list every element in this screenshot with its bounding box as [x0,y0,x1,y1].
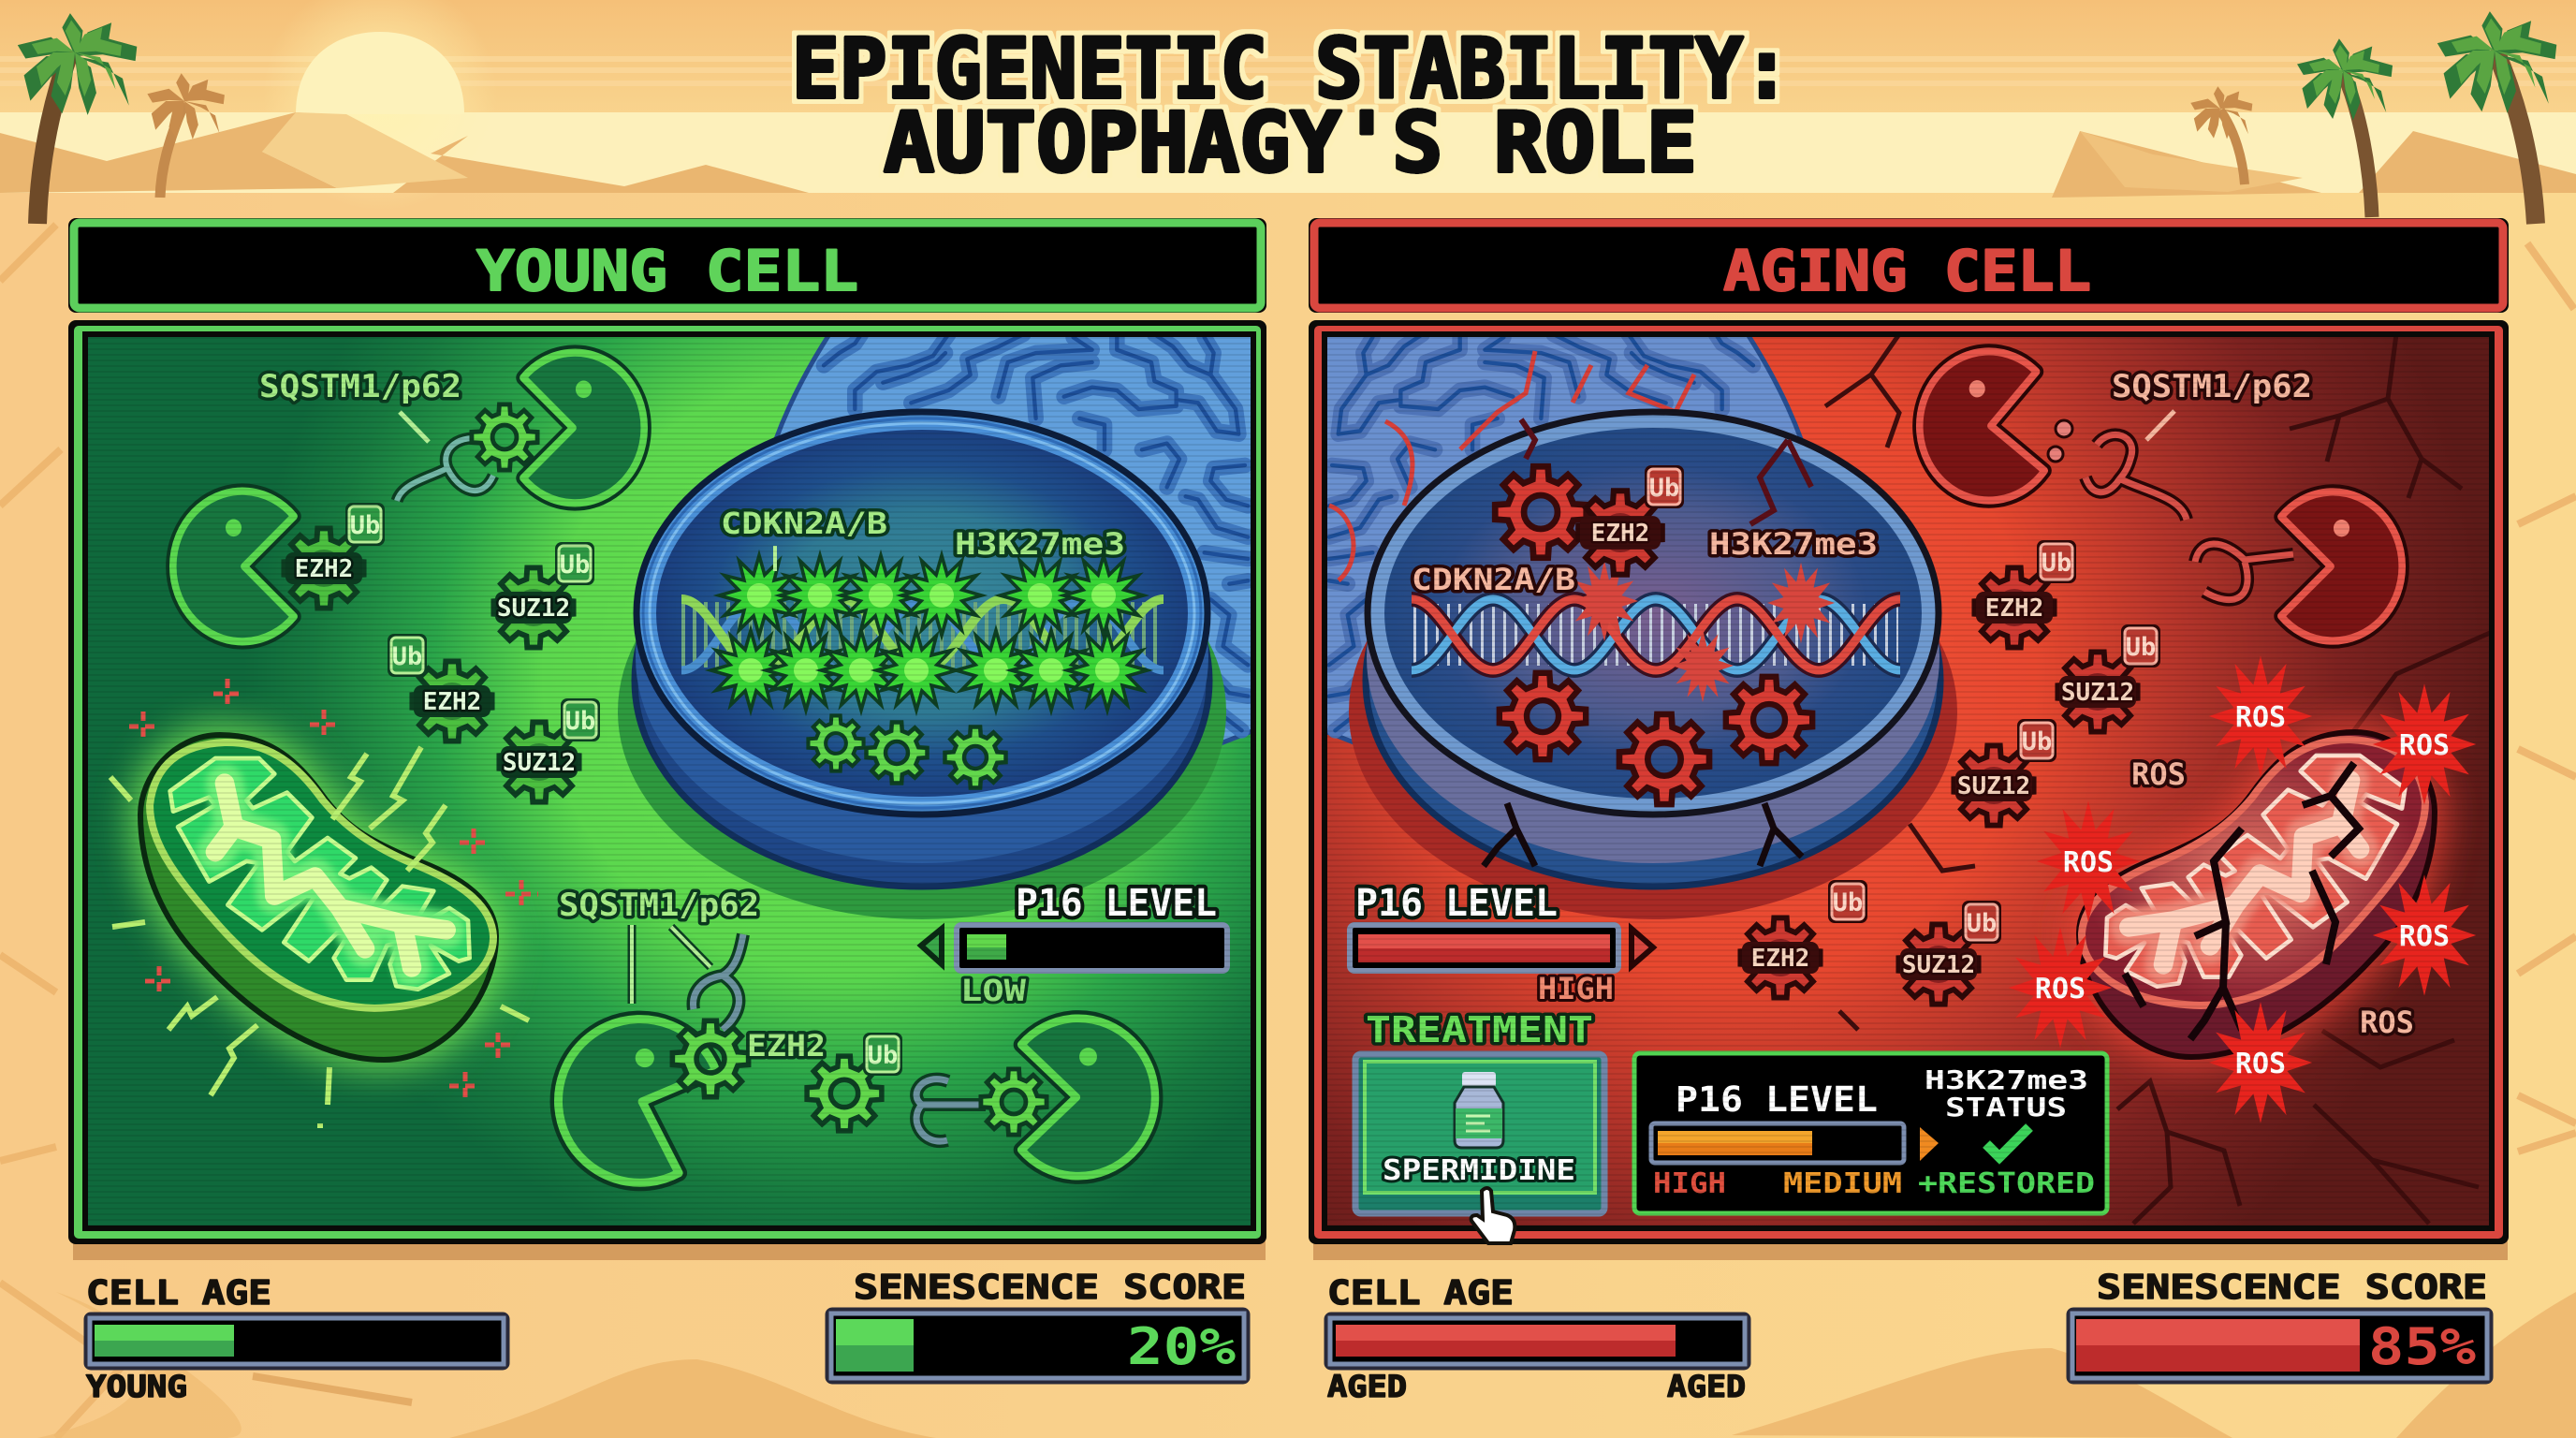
DNA with damage bursts [1412,561,1900,702]
gauge: aging cell age: AGED [1327,1369,1407,1404]
label: CDKN2A/B: CDKN2A/B [721,506,887,541]
header: aging cell [1309,218,2509,313]
protein: SUZ12 second [499,698,600,802]
nucleus shadow [1349,504,1957,919]
label: H3K27me3: H3K27me3 [955,526,1125,562]
ROS bursts: ROS [2399,729,2450,762]
gear with ubiquitin tag: Ub [868,1041,898,1070]
far dunes left [0,112,809,193]
pointer line aged [2146,411,2174,440]
brain [1323,334,1830,763]
red crosshair sparks [129,679,538,1100]
debris dots [2048,420,2072,462]
gauge: aging senescence score [2070,1269,2490,1381]
label: CDKN2A/B aged: CDKN2A/B [1412,562,1575,597]
protein: SUZ12 second: SUZ12 [503,749,576,777]
gauge: young senescence score [828,1269,1247,1381]
damaged pacman top [1914,347,2046,506]
gear: EZH2 [672,1020,749,1097]
gear held by claw [472,404,537,470]
label: SQSTM1/p62 aged: SQSTM1/p62 [2112,368,2312,405]
ROS plain labels [2131,756,2414,1040]
gauge: aging senescence score: 85% [2368,1317,2477,1376]
ROS bursts: ROS [2235,1048,2286,1080]
protein: EZH2 aged: EZH2 [1985,594,2043,623]
bottom dunes [37,1292,2576,1438]
label: SQSTM1/p62 top: SQSTM1/p62 [259,368,461,405]
inner frame edge [85,334,1253,1228]
nucleus [1366,412,1940,887]
title: AUTOPHAGY'S ROLE [884,95,1697,191]
spermidine button [1355,1054,1604,1213]
protein: EZH2 in nucleus [1578,465,1684,575]
protein: SUZ12: SUZ12 [497,594,570,623]
protein: EZH2 aged third: Ub [1833,888,1863,917]
icon: bottle [1455,1072,1503,1148]
panel scene [85,334,1254,1228]
nucleus gears [808,715,1006,788]
P16 level indicator young: LOW [960,973,1027,1008]
background cracks [1825,334,2490,1224]
protein: EZH2 in nucleus: Ub [1649,474,1679,503]
mitochondrion cracks [2125,763,2359,1039]
protein: SUZ12 aged: SUZ12 [2061,679,2134,707]
P16 level indicator aging [1350,882,1653,1006]
ROS bursts: ROS [2235,701,2286,734]
protein: EZH2: Ub [350,511,380,540]
protein: EZH2 second: EZH2 [423,688,481,716]
protein: SUZ12 aged third: Ub [1967,909,1997,938]
gauge: young senescence score: SENESCENCE SCORE [854,1269,1246,1307]
mitochondrion healthy [140,735,496,1060]
status readout box: P16 LEVEL [1676,1079,1878,1120]
ROS plain labels: ROS [2360,1005,2414,1040]
protein: EZH2 aged: Ub [2042,549,2071,578]
gauge: aging cell age [1327,1274,1748,1404]
p62 claw horizontal [916,1079,986,1141]
protein: SUZ12 second: Ub [565,707,595,736]
damaged pacman right [2281,492,2402,641]
icon: check mark [1986,1127,2029,1157]
p62 claw top [397,438,493,501]
label: H3K27me3 aged: H3K27me3 [1709,526,1878,562]
pointer lines [632,925,710,1004]
background: sky [0,0,2576,117]
P16 level indicator aging: HIGH [1538,971,1614,1006]
label: EZH2: EZH2 [747,1028,826,1064]
broken p62 claws [2086,434,2293,600]
header: young cell: YOUNG CELL [476,239,858,304]
protein: SUZ12 [493,542,594,648]
protein: SUZ12 aged third: SUZ12 [1902,951,1975,979]
palm tree: large left [18,13,137,224]
autophagosome pacman bottom right [1021,1019,1155,1176]
pointer line [400,412,429,442]
autophagosome pacman top [523,353,644,503]
status readout box [1634,1053,2107,1213]
panel scene [1323,334,2492,1228]
palm tree: medium right [2297,38,2393,217]
spermidine button: SPERMIDINE [1383,1154,1575,1187]
protein: SUZ12 aged second [1954,719,2056,826]
nucleus shadow [618,640,1226,919]
palm tree: small right [2190,86,2252,184]
label line: CDKN2A/B [773,546,777,571]
brain [774,337,1251,745]
protein: EZH2: EZH2 [295,555,353,583]
header: aging cell: AGING CELL [1723,239,2091,304]
autophagosome pacman left [173,492,294,641]
title [792,21,1791,191]
protein: SUZ12 aged: Ub [2126,633,2156,662]
energy sparks [110,747,529,1128]
panel frame [68,320,1266,1244]
ROS plain labels: ROS [2131,756,2186,792]
protein: EZH2 second: Ub [392,642,422,671]
panel: aging cell [1309,320,2509,1244]
panel: young cell [68,320,1266,1244]
sun [263,0,497,211]
mitochondrion damaged [2079,732,2435,1057]
panel frame [1309,320,2509,1244]
far dunes right [2052,131,2576,198]
palm tree: large right [2437,11,2556,224]
status readout box: +RESTORED [1918,1167,2095,1200]
status readout box: MEDIUM [1783,1167,1902,1200]
protein: SUZ12 aged second: Ub [2022,727,2052,756]
nucleus gears [1495,466,1812,804]
icon: pointer hand cursor [1471,1188,1515,1243]
protein: EZH2 aged third: EZH2 [1751,945,1809,973]
ROS bursts: ROS [2063,846,2114,879]
protein: SUZ12 aged second: SUZ12 [1957,772,2030,800]
protein: SUZ12: Ub [560,550,590,580]
scanlines aging [1325,334,2492,1228]
protein: SUZ12 aged third [1898,901,2001,1005]
gauge: young cell age: YOUNG [86,1369,187,1404]
P16 level indicator young [921,882,1227,1008]
DNA with H3K27me3 marks [681,558,1164,708]
label: treatment: TREATMENT [1366,1009,1593,1050]
gauge: aging cell age: AGED [1667,1369,1746,1404]
gauge: young cell age: CELL AGE [86,1274,271,1313]
gauge: aging cell age: CELL AGE [1327,1274,1514,1313]
palm tree: small left [147,73,225,198]
ROS bursts [2009,655,2476,1123]
status readout box: H3K27me3 [1925,1064,2088,1095]
background: pale horizon band [0,112,2576,195]
protein: EZH2 in nucleus: EZH2 [1591,520,1649,548]
P16 level indicator young: P16 LEVEL [1016,882,1217,925]
gauge: aging senescence score: SENESCENCE SCORE [2097,1269,2487,1307]
header: young cell [68,218,1266,313]
gauge: young senescence score: 20% [1127,1317,1237,1376]
status readout box: HIGH [1653,1167,1726,1200]
label: SQSTM1/p62 bottom: SQSTM1/p62 [559,887,759,924]
gear at pacman mouth [981,1069,1046,1135]
protein: EZH2 aged third [1740,880,1867,998]
title: EPIGENETIC STABILITY: [792,21,1791,117]
status readout box: STATUS [1945,1092,2067,1123]
nucleus [635,412,1209,887]
P16 level indicator aging: P16 LEVEL [1355,882,1558,925]
scanlines young [85,334,1253,1228]
protein: EZH2 [284,503,385,609]
background: horizon stripes [0,56,2576,86]
autophagosome pacman bottom left [535,996,725,1198]
protein: EZH2 aged [1974,540,2076,648]
ROS bursts: ROS [2399,920,2450,953]
ROS bursts: ROS [2035,973,2086,1005]
panel shadows [73,1241,2508,1260]
inner frame edge [1325,334,2492,1228]
p62 claw bottom [694,934,743,1030]
gear with ubiquitin tag [807,1033,902,1131]
gauge: young cell age [86,1274,506,1404]
protein: SUZ12 aged [2057,624,2160,732]
protein: EZH2 second [388,634,492,741]
